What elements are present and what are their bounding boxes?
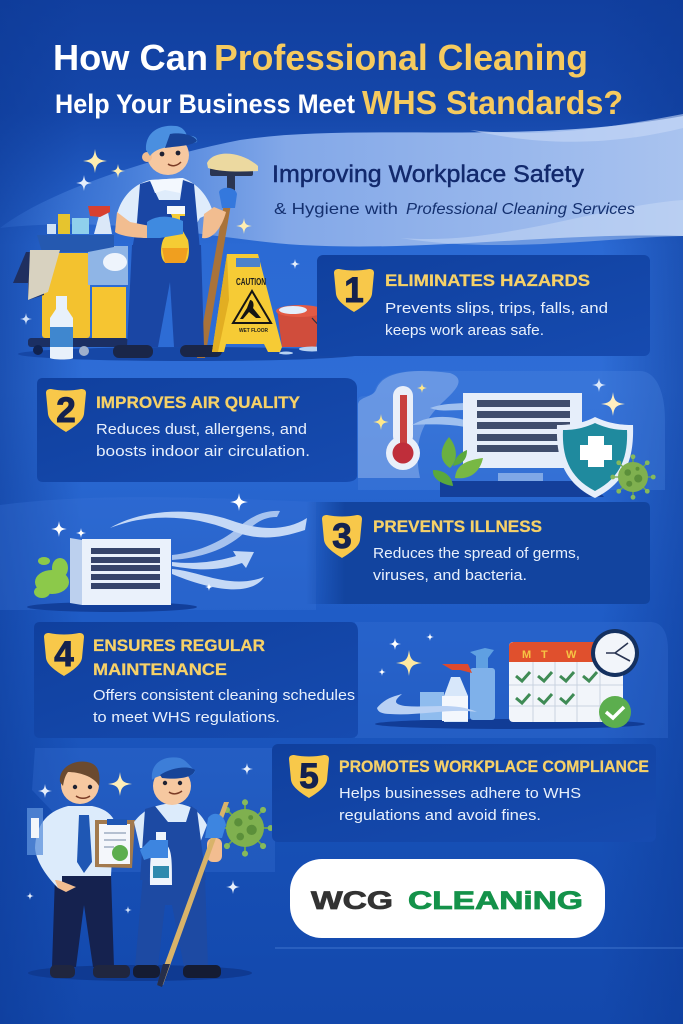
panel 5: promotes workplace compliance: regulations and avoid fines. bbox=[339, 807, 541, 824]
illustration: air vent with airflow bbox=[0, 493, 316, 612]
panel 5: promotes workplace compliance: PROMOTES WORKPLACE COMPLIANCE bbox=[339, 758, 649, 776]
title bbox=[53, 37, 623, 121]
mop bbox=[197, 154, 258, 358]
title: Help Your Business Meet bbox=[55, 89, 355, 119]
panel 3: prevents illness bbox=[306, 502, 650, 604]
badge 2: 2 bbox=[56, 391, 76, 430]
panel 5: promotes workplace compliance: Helps businesses adhere to WHS bbox=[339, 785, 581, 802]
floor shadow bbox=[18, 347, 362, 361]
caution sign: WET FLOOR bbox=[239, 328, 268, 334]
panel 2 backdrop: air quality illustration bbox=[358, 371, 665, 500]
shield bbox=[557, 417, 633, 498]
shirt bbox=[117, 178, 213, 235]
panel 3: prevents illness: PREVENTS ILLNESS bbox=[373, 518, 542, 536]
head bbox=[147, 135, 189, 175]
panel 1: eliminates hazards: Prevents slips, trips, falls, and bbox=[385, 300, 608, 317]
panel 4: ensures regular maintenance: ENSURES REGULAR bbox=[93, 637, 265, 655]
panel 4: ensures regular maintenance: Offers consistent cleaning schedules bbox=[93, 687, 355, 704]
sparkles bbox=[20, 149, 300, 325]
badge 4: 4 bbox=[54, 635, 74, 674]
illustration: cleaner with cart and caution sign bbox=[13, 126, 362, 361]
badge 2 bbox=[46, 389, 86, 432]
subtitle bbox=[272, 161, 635, 218]
calendar: T bbox=[541, 649, 548, 661]
subtitle: Improving Workplace Safety bbox=[272, 161, 584, 188]
calendar bbox=[509, 642, 623, 722]
illustration: manager and cleaner bbox=[26, 748, 275, 987]
panel 2: improves air quality bbox=[37, 378, 357, 482]
panel 1: eliminates hazards: ELIMINATES HAZARDS bbox=[385, 272, 590, 290]
panel 1: eliminates hazards: keeps work areas safe. bbox=[385, 322, 544, 339]
legs bbox=[127, 245, 204, 347]
calendar: W bbox=[566, 649, 577, 661]
illustration: supplies and schedule calendar bbox=[355, 622, 668, 738]
panel 2: improves air quality: Reduces dust, allergens, and bbox=[96, 421, 307, 438]
clock bbox=[591, 629, 639, 677]
manager bbox=[27, 761, 135, 978]
red bucket bbox=[276, 305, 347, 354]
worker bbox=[113, 126, 237, 358]
logo: WCG Cleaning: WCG bbox=[311, 887, 393, 915]
subtitle: Professional Cleaning Services bbox=[406, 201, 635, 218]
cleaning cart bbox=[13, 206, 128, 360]
spray bottles bbox=[377, 648, 495, 722]
thermometer bbox=[386, 386, 420, 470]
spray bottle bbox=[161, 207, 189, 263]
cleaner bbox=[133, 757, 229, 987]
caution sign: CAUTION bbox=[236, 277, 266, 288]
badge 3: 3 bbox=[332, 517, 352, 556]
panel 2: improves air quality: boosts indoor air circulation. bbox=[96, 443, 310, 460]
air flow streams bbox=[110, 511, 307, 589]
arms bbox=[115, 212, 150, 238]
plant bbox=[433, 437, 483, 486]
panel 4: ensures regular maintenance: to meet WHS regulations. bbox=[93, 709, 280, 726]
badge 3 bbox=[322, 515, 362, 558]
header swoosh banner bbox=[0, 114, 683, 246]
plant bbox=[34, 557, 69, 598]
footer rule bbox=[275, 947, 683, 949]
title: Professional Cleaning bbox=[214, 37, 588, 78]
panel 4: ensures regular maintenance bbox=[34, 622, 358, 738]
air vent bbox=[412, 393, 582, 481]
vent unit bbox=[70, 538, 171, 605]
badge 1 bbox=[334, 269, 374, 312]
panel 1: eliminates hazards bbox=[317, 255, 650, 356]
panel 5: promotes workplace compliance bbox=[272, 744, 656, 842]
title: How Can bbox=[53, 37, 208, 78]
logo: WCG Cleaning bbox=[290, 859, 605, 938]
subtitle: & Hygiene with bbox=[274, 201, 398, 218]
panel 4: ensures regular maintenance: MAINTENANCE bbox=[93, 661, 227, 679]
badge 5 bbox=[289, 755, 329, 798]
badge 1: 1 bbox=[344, 271, 364, 310]
virus bbox=[610, 454, 656, 500]
panel 2: improves air quality: IMPROVES AIR QUALITY bbox=[96, 394, 300, 412]
badge 5: 5 bbox=[299, 757, 319, 796]
logo: WCG Cleaning: CLEANiNG bbox=[408, 887, 583, 915]
panel 3: prevents illness: viruses, and bacteria. bbox=[373, 567, 527, 584]
overall bib bbox=[132, 180, 200, 250]
virus bbox=[216, 799, 274, 857]
check badge bbox=[599, 696, 631, 728]
caution sign bbox=[212, 254, 282, 352]
title: WHS Standards? bbox=[362, 84, 623, 121]
calendar: M bbox=[522, 649, 531, 661]
badge 4 bbox=[44, 633, 84, 676]
panel 3: prevents illness: Reduces the spread of germs, bbox=[373, 545, 580, 562]
